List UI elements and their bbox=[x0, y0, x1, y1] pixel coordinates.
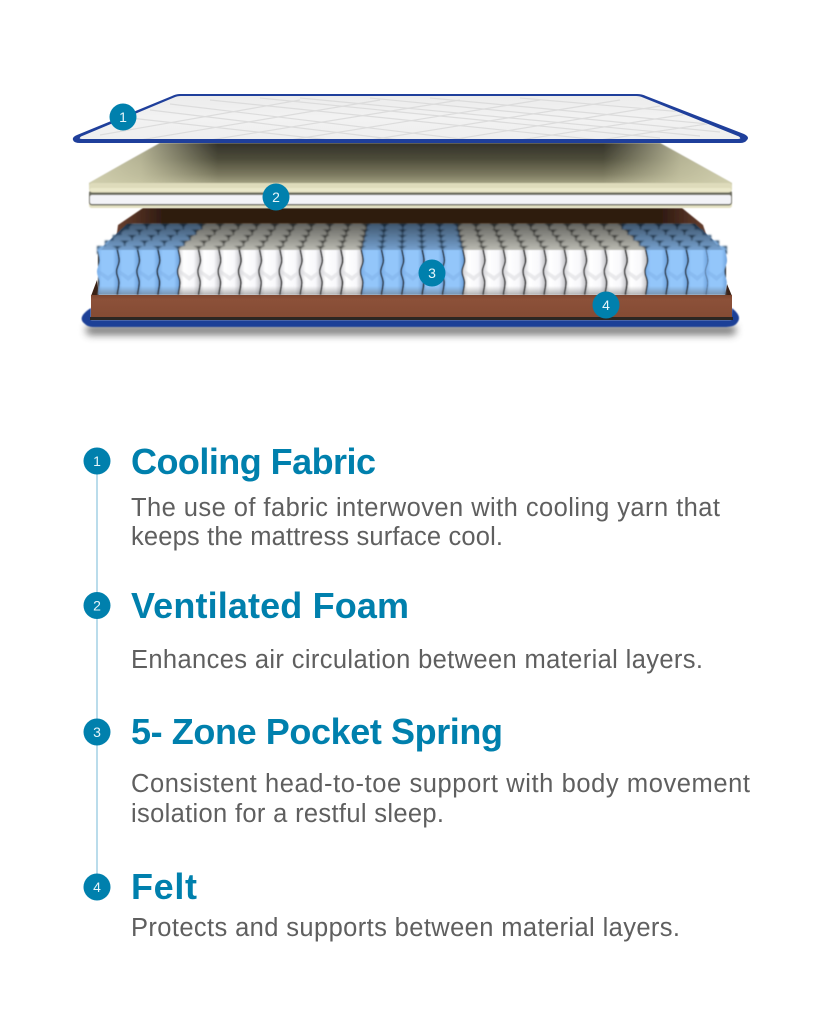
timeline connector bbox=[96, 461, 98, 887]
list badge 3 bbox=[84, 718, 110, 746]
list badge 1: 1 bbox=[93, 453, 101, 469]
fabric border bbox=[73, 94, 748, 143]
foam white band bbox=[90, 195, 731, 204]
list badge 3: 3 bbox=[93, 724, 101, 740]
badge 2 bbox=[262, 184, 290, 210]
spring fronts bbox=[97, 250, 727, 295]
item 2: Ventilated Foam bbox=[84, 585, 703, 674]
layer: cooling fabric bbox=[73, 94, 748, 143]
layer: back felt wall bbox=[116, 208, 708, 240]
description bbox=[131, 770, 750, 828]
felt shadow line bbox=[90, 317, 733, 320]
description: Protects and supports between material layers. bbox=[131, 914, 680, 942]
mattress illustration bbox=[73, 94, 748, 335]
list badge 1 bbox=[84, 448, 110, 474]
item 3: 5- Zone Pocket Spring bbox=[84, 711, 750, 828]
heading: Felt bbox=[131, 866, 197, 907]
description bbox=[131, 494, 720, 551]
layer: ventilated foam bbox=[89, 143, 732, 208]
description: Enhances air circulation between material layers. bbox=[131, 646, 703, 674]
layer: side walls bbox=[91, 280, 732, 296]
description: The use of fabric interwoven with cooling yarn that bbox=[131, 494, 720, 522]
description: isolation for a restful sleep. bbox=[131, 800, 444, 828]
list badge 4 bbox=[84, 874, 110, 900]
list badge 4: 4 bbox=[93, 879, 101, 895]
foam top surface bbox=[89, 143, 732, 188]
heading: 5- Zone Pocket Spring bbox=[131, 711, 503, 752]
ground shadow bbox=[86, 325, 736, 335]
item 4: Felt bbox=[84, 866, 680, 942]
item 1: Cooling Fabric bbox=[84, 441, 720, 551]
badge 2: 2 bbox=[272, 189, 280, 205]
list badge 2 bbox=[84, 592, 110, 619]
badge 1 bbox=[110, 104, 136, 130]
spring tops bbox=[97, 224, 727, 254]
fabric surface bbox=[80, 96, 740, 139]
layer: base border bbox=[82, 308, 739, 327]
heading: Ventilated Foam bbox=[131, 585, 409, 626]
layer: pocket springs bbox=[97, 224, 727, 295]
badge 1: 1 bbox=[119, 109, 127, 125]
foam cream band bbox=[89, 183, 732, 192]
badge 4: 4 bbox=[602, 297, 610, 313]
badge 3 bbox=[418, 260, 446, 286]
heading: Cooling Fabric bbox=[131, 441, 376, 482]
description: keeps the mattress surface cool. bbox=[131, 523, 503, 551]
layer: felt front bbox=[91, 295, 732, 317]
list badge 2: 2 bbox=[93, 598, 101, 614]
fabric quilting bbox=[100, 98, 730, 140]
badge 4 bbox=[592, 292, 620, 318]
foam outline bbox=[89, 190, 732, 206]
description: Consistent head-to-toe support with body movement bbox=[131, 770, 750, 798]
foam lower band bbox=[89, 202, 732, 208]
badge 3: 3 bbox=[428, 265, 436, 281]
